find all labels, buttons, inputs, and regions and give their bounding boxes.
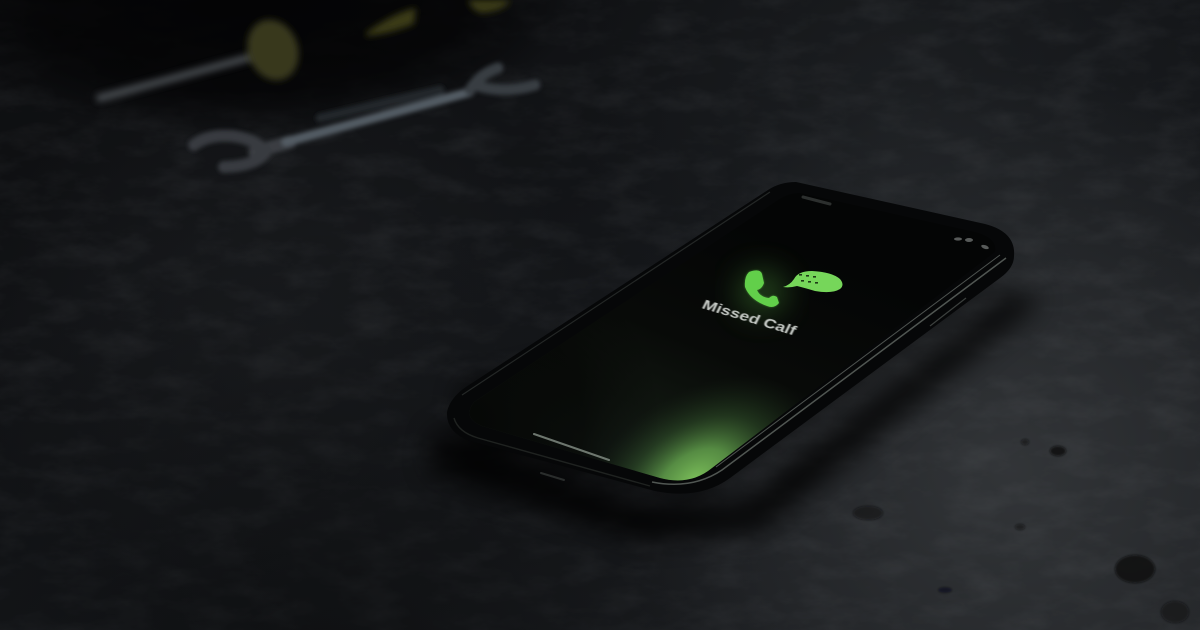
concrete pits and specks xyxy=(853,439,1189,623)
phone side rim highlight xyxy=(652,258,1006,484)
icon glow xyxy=(736,268,788,316)
phone xyxy=(440,180,1020,500)
phone body xyxy=(447,182,1014,494)
tool: blurred screwdriver xyxy=(100,0,510,98)
side button xyxy=(930,298,966,326)
label: missed call text: Missed Calf xyxy=(699,298,799,339)
phone shadow xyxy=(430,270,1040,540)
status bar marks xyxy=(954,237,989,250)
icon: phone handset xyxy=(745,270,779,307)
icon: chat bubble xyxy=(783,271,842,292)
speaker slot xyxy=(541,473,564,480)
phone screen xyxy=(562,356,796,480)
tool: blurred wrench xyxy=(194,68,535,167)
top glint xyxy=(803,197,830,204)
home indicator glint xyxy=(534,434,609,460)
